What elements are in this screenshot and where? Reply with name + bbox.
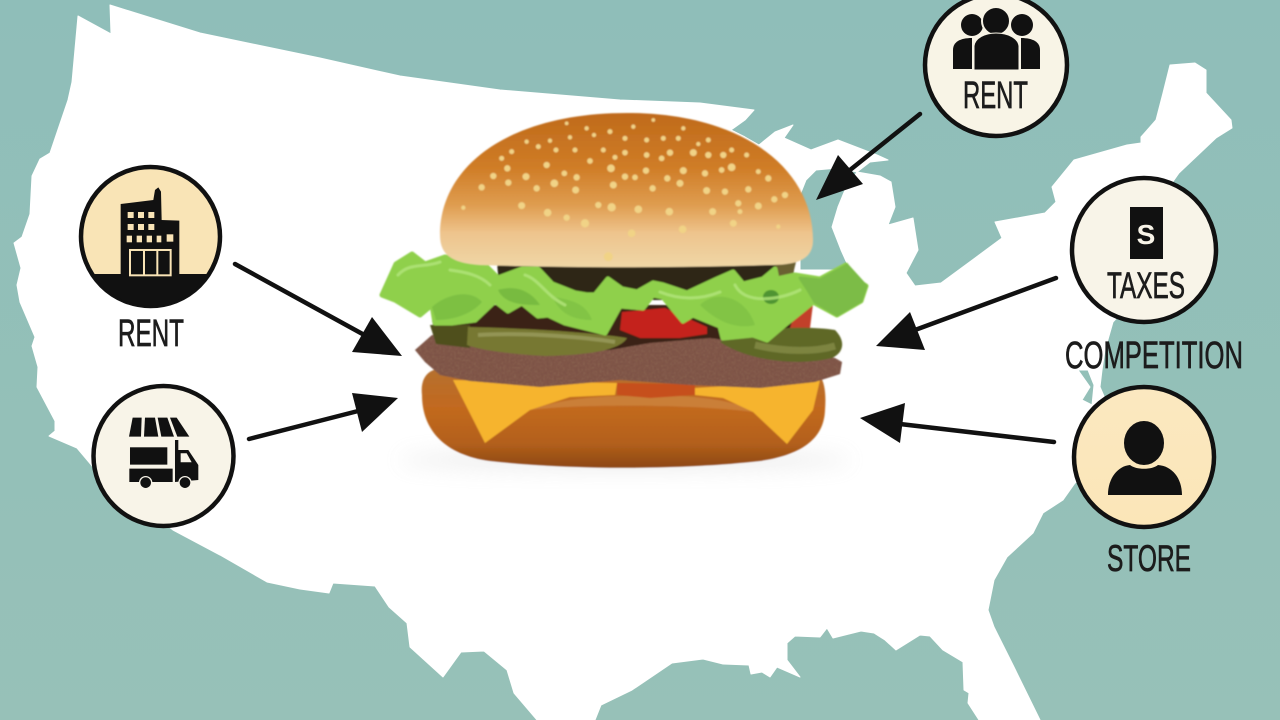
icon circle: rent building bbox=[78, 164, 222, 308]
sauce bbox=[617, 383, 695, 398]
icon circle: taxes bbox=[1072, 178, 1216, 322]
dark filling layer bbox=[432, 305, 830, 365]
icon: tax tag with dollar: S bbox=[1137, 219, 1155, 250]
icon: ground bbox=[94, 274, 206, 304]
arrow: top right rent to burger bbox=[816, 114, 920, 200]
patty bbox=[415, 335, 842, 388]
lettuce bbox=[382, 254, 866, 340]
cheese bbox=[453, 380, 820, 444]
label: rent left: RENT bbox=[118, 313, 184, 355]
icon circle: food truck bbox=[94, 386, 234, 526]
top bun bbox=[440, 113, 813, 267]
bottom bun bbox=[422, 368, 825, 468]
label: taxes: TAXES bbox=[1107, 265, 1185, 306]
arrow: rent building to burger bbox=[235, 264, 402, 356]
pickles bbox=[430, 325, 842, 362]
sesame seeds bbox=[462, 119, 788, 261]
icon: group of people bbox=[953, 7, 1040, 70]
label: rent: RENT bbox=[963, 75, 1028, 117]
bun crust highlight bbox=[530, 396, 753, 412]
icon: building bbox=[121, 187, 179, 276]
tomato bbox=[620, 308, 707, 338]
burger shadow bbox=[400, 449, 850, 471]
icon circle: store person bbox=[1074, 387, 1214, 527]
burger bbox=[382, 113, 866, 471]
lettuce shading bbox=[432, 288, 755, 326]
arrow: truck to burger bbox=[249, 393, 398, 439]
icon: person bbox=[1108, 421, 1182, 495]
icon: truck with awning bbox=[129, 418, 198, 489]
label: store: STORE bbox=[1107, 538, 1191, 579]
icon: tax tag with dollar bbox=[1130, 207, 1163, 259]
arrow: taxes to burger bbox=[876, 278, 1056, 350]
arrow: store to burger bbox=[860, 403, 1054, 443]
lettuce right lobe shade bbox=[800, 265, 866, 315]
icon circle: rent people bbox=[925, 0, 1067, 136]
dark filling under bun bbox=[497, 262, 795, 300]
